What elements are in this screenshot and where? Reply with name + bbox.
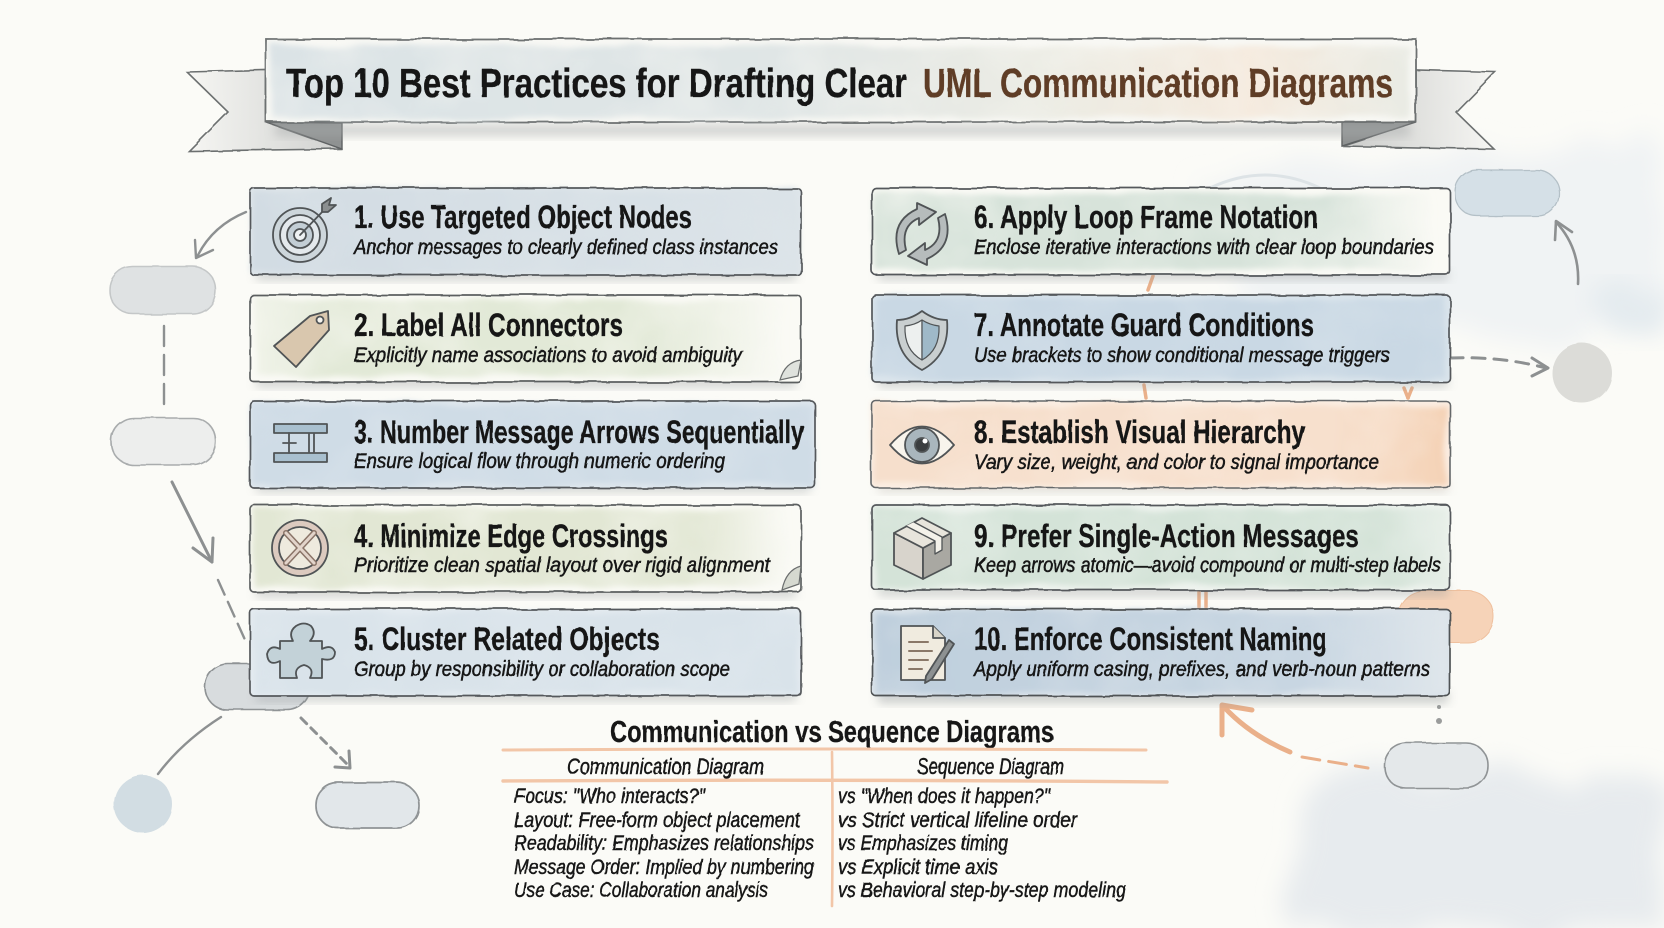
arrow: dashed connector top left nodes — [163, 326, 165, 408]
heading: 3. Number Message Arrows Sequentially — [354, 414, 804, 450]
heading: 5. Cluster Related Objects — [354, 621, 660, 657]
diagram node: top right blue pill — [1455, 170, 1559, 216]
arrow: dashed to bottom pill — [301, 718, 350, 768]
arrow: orange curve to card 10 — [1222, 705, 1368, 768]
description: Group by responsibility or collaboration scope — [354, 657, 730, 681]
panel: practice 2 — [250, 295, 801, 387]
panel: practice 9 — [872, 505, 1450, 596]
column: communication rows: Layout: Free-form object placement — [514, 808, 801, 832]
panel: practice 1 — [250, 188, 801, 280]
curled corner — [780, 360, 801, 380]
column: sequence rows: vs Emphasizes timing — [838, 831, 1008, 855]
diagram node: right gray circle — [1552, 343, 1612, 403]
panel: practice 8 — [872, 401, 1450, 492]
heading: 4. Minimize Edge Crossings — [354, 518, 668, 554]
title text: Top 10 Best Practices for Drafting Clear — [286, 60, 907, 106]
description: Anchor messages to clearly defined class instances — [352, 235, 778, 259]
heading: 7. Annotate Guard Conditions — [974, 307, 1314, 343]
diagram node: blue circle — [114, 775, 172, 833]
column: sequence rows: vs Behavioral step-by-step modeling — [838, 878, 1126, 902]
icon: tag — [274, 311, 329, 367]
dots near card 10 — [1436, 705, 1442, 724]
arrow: left node downward — [172, 482, 213, 562]
description: Vary size, weight, and color to signal importance — [974, 450, 1379, 474]
ribbon tail right — [1342, 70, 1495, 149]
diagram node: bottom right pill — [1384, 743, 1488, 788]
table rules — [503, 749, 1167, 906]
icon: loop arrows — [896, 203, 948, 265]
heading: 2. Label All Connectors — [354, 307, 623, 343]
table title: Communication vs Sequence Diagrams — [610, 714, 1054, 749]
diagram node: bottom pill — [316, 783, 419, 828]
column: communication rows: Use Case: Collaboration analysis — [514, 878, 768, 902]
description: Explicitly name associations to avoid ambiguity — [354, 343, 743, 367]
icon: box — [894, 518, 951, 579]
column: sequence rows: vs Explicit time axis — [838, 855, 998, 879]
comparison table — [503, 714, 1167, 906]
panel: practice 5 — [250, 609, 801, 701]
column: sequence rows: vs "When does it happen?" — [838, 784, 1051, 808]
banner body — [266, 39, 1416, 122]
icon: puzzle piece — [267, 624, 335, 678]
icon: eye — [890, 426, 954, 464]
title text — [286, 60, 1393, 106]
icon: target — [273, 198, 336, 262]
panel: practice 3 — [250, 401, 815, 492]
panel: practice 6 — [872, 188, 1450, 280]
banner wash — [272, 46, 1410, 118]
heading: 1. Use Targeted Object Nodes — [354, 199, 692, 235]
panel: practice 7 — [872, 295, 1450, 387]
title banner — [187, 39, 1495, 151]
panel: practice 10 — [872, 609, 1450, 703]
column: communication rows: Focus: "Who interacts?" — [514, 784, 706, 808]
column: communication rows: Readability: Emphasizes relationships — [514, 831, 814, 855]
arrow: card 1 to top left node — [195, 212, 246, 258]
diagram node: pale arc above card 6 — [1210, 175, 1320, 188]
column: communication rows: Message Order: Implied by numbering — [514, 855, 814, 879]
arrow: dashed connector to card 5 node — [218, 580, 246, 642]
arrow: curve to blue circle — [158, 717, 221, 774]
diagram node: pill behind card 5 — [205, 664, 310, 710]
watercolor wash: right edge — [1590, 285, 1664, 340]
arrow: dashed to right circle — [1450, 358, 1548, 376]
description: Apply uniform casing, prefixes, and verb-noun patterns — [972, 657, 1430, 681]
description: Enclose iterative interactions with clear loop boundaries — [974, 235, 1434, 259]
column: communication rows — [514, 784, 814, 902]
column header: communication: Communication Diagram — [567, 754, 764, 779]
heading: 6. Apply Loop Frame Notation — [974, 199, 1318, 235]
arrow fragments: orange stubs between cards — [1144, 276, 1412, 607]
diagram node: left pale pill — [111, 418, 216, 465]
description: Ensure logical flow through numeric ordering — [354, 449, 725, 473]
description: Prioritize clean spatial layout over rigid alignment — [354, 553, 771, 577]
column: sequence rows: vs Strict vertical lifeline order — [838, 808, 1078, 832]
curled corner — [782, 566, 801, 590]
watercolor wash: top right — [1190, 140, 1664, 345]
icon: shield — [897, 311, 947, 370]
diagram node: top left gray pill — [110, 267, 216, 314]
panel: practice 4 — [250, 505, 801, 597]
heading: 9. Prefer Single-Action Messages — [974, 518, 1359, 554]
watercolor wash: bottom right — [1282, 769, 1664, 928]
column: sequence rows — [838, 784, 1126, 902]
icon: document with pen — [901, 626, 954, 683]
description: Keep arrows atomic—avoid compound or multi-step labels — [974, 553, 1441, 577]
title text: UML Communication Diagrams — [923, 60, 1393, 106]
arrow: curve to top right pill — [1555, 221, 1578, 284]
heading: 10. Enforce Consistent Naming — [974, 621, 1327, 657]
diagram node: orange pill — [1398, 591, 1494, 643]
icon: numbered sequence bars — [274, 424, 327, 462]
banner shadow — [275, 124, 1410, 136]
icon: crossed circle — [272, 520, 328, 576]
description: Use brackets to show conditional message triggers — [974, 343, 1390, 367]
ribbon tail left — [187, 70, 342, 151]
column header: sequence: Sequence Diagram — [917, 754, 1064, 779]
heading: 8. Establish Visual Hierarchy — [974, 414, 1305, 450]
